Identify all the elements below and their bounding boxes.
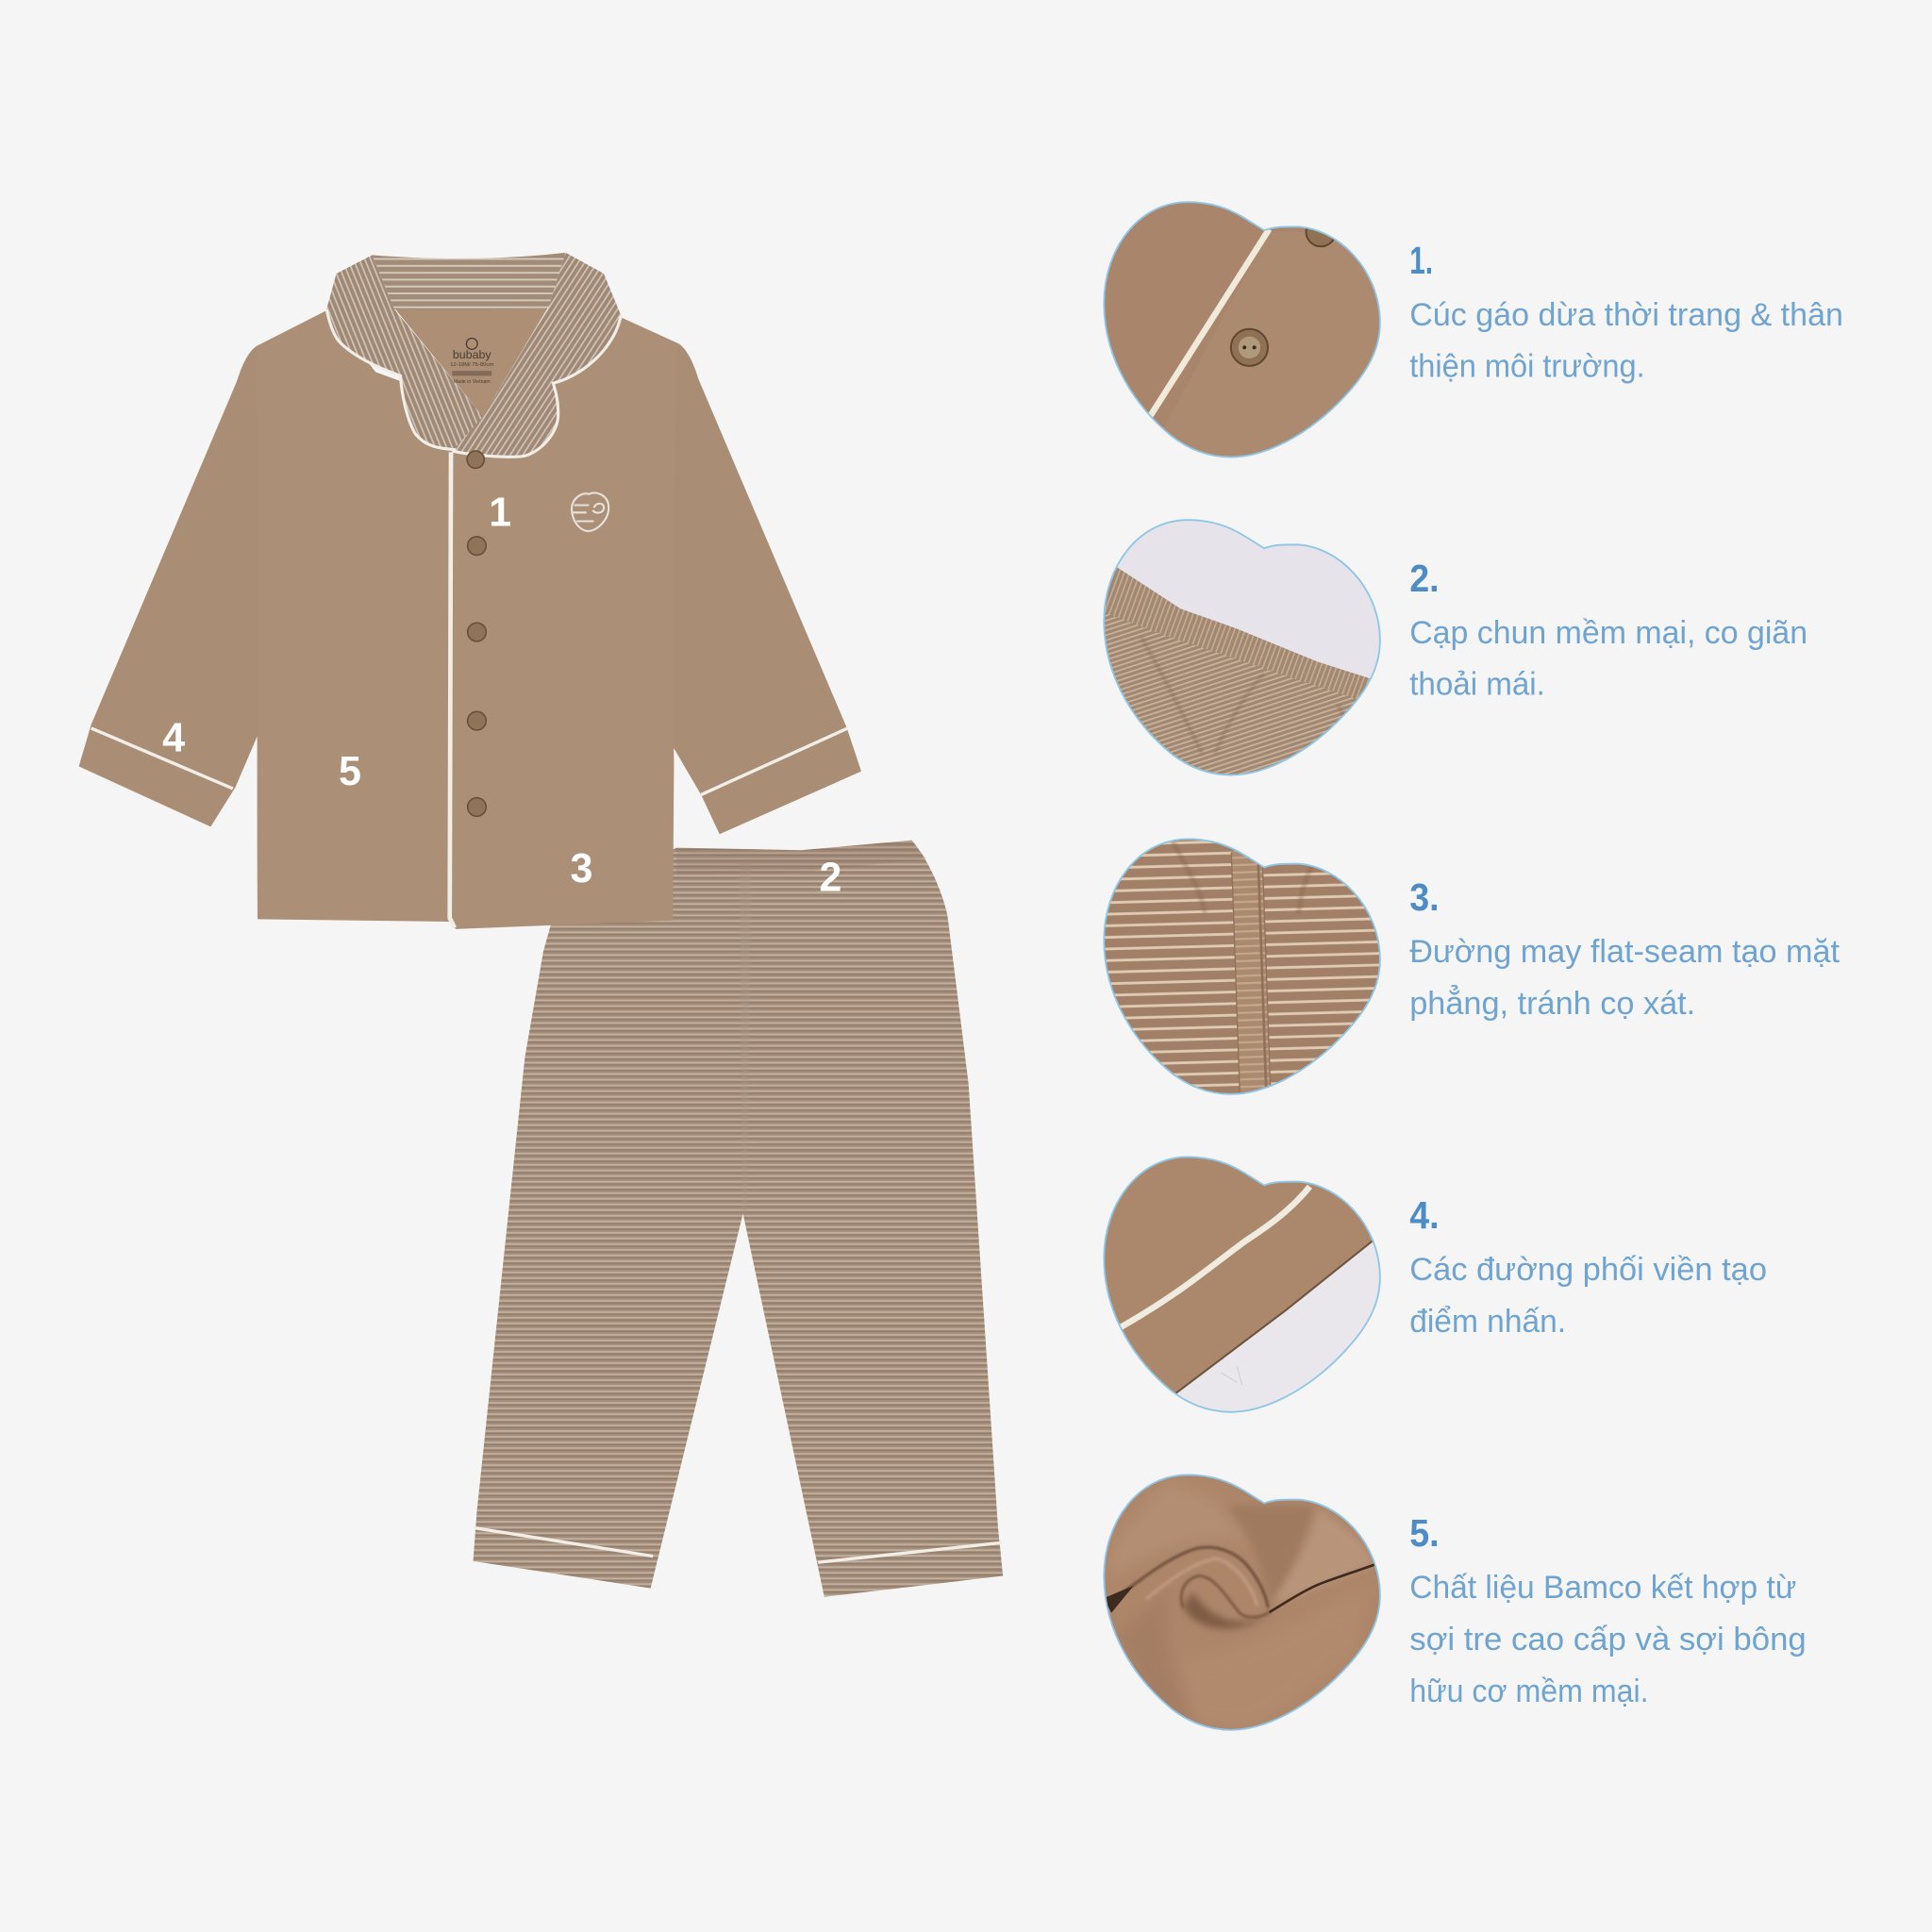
embroidered heart logo: [572, 492, 608, 531]
feature 4 text: Các đường phối viền tạo: [1409, 1252, 1767, 1288]
right cuff piping: [701, 728, 848, 794]
pants left hem piping: [475, 1528, 653, 1557]
pants body: [474, 841, 1003, 1597]
left dark wedge: [1104, 1586, 1134, 1613]
pants waistband: [676, 841, 926, 874]
feature marker 1: 1: [489, 491, 511, 536]
left cuff piping: [92, 728, 233, 789]
feature 5 text: 5.: [1409, 1511, 1440, 1555]
lower left dark drape: [1132, 1619, 1179, 1707]
feature 5 text: [1409, 1511, 1807, 1709]
light lower drape: [1178, 1586, 1369, 1730]
pants centre seam shading: [740, 862, 752, 1214]
feature marker 2: 2: [819, 855, 841, 900]
feature 3 text: [1409, 875, 1840, 1022]
light top-left drape: [1124, 1500, 1213, 1555]
shirt body: [257, 310, 679, 929]
feature 5 text: hữu cơ mềm mại.: [1409, 1674, 1649, 1709]
feature 3 text: Đường may flat-seam tạo mặt: [1409, 934, 1840, 970]
neck inside: [394, 307, 548, 416]
feature 3 text: 3.: [1409, 875, 1440, 919]
right dark crease: [1271, 1563, 1377, 1611]
feature 4 text: [1409, 1193, 1767, 1340]
left dark crease: [1109, 1547, 1268, 1607]
feature 5 text: sợi tre cao cấp và sợi bông: [1409, 1622, 1807, 1657]
neck label: 12-18M/ 76-80cm: [450, 362, 493, 368]
product: pyjama pants: [474, 841, 1003, 1597]
feature 1 text: Cúc gáo dừa thời trang & thân: [1409, 297, 1843, 333]
neck label: Made in Vietnam: [454, 379, 491, 385]
feature 4 text: điểm nhấn.: [1409, 1304, 1566, 1340]
feature 1 text: 1.: [1409, 239, 1433, 282]
feature marker 3: 3: [571, 846, 592, 891]
heart photo 2: elastic waistband: [1104, 520, 1382, 775]
coconut buttons: [467, 451, 486, 816]
feature 1 text: thiện môi trường.: [1409, 349, 1645, 385]
heart photo 4: piped cuff: [1104, 1157, 1380, 1412]
neck label: bubaby: [453, 348, 491, 361]
collar back stripes: [372, 253, 566, 310]
heart photo 3: flat seam: [1104, 839, 1380, 1094]
feature 1 text: [1409, 239, 1843, 385]
feature 4 text: 4.: [1409, 1193, 1440, 1237]
dark wedge above centre: [1233, 1507, 1309, 1598]
collar left piping: [326, 309, 456, 450]
fold shading under swirl: [1183, 1592, 1271, 1629]
feature 2 text: [1409, 557, 1807, 703]
feature marker 5: 5: [339, 749, 361, 794]
feature 2 text: thoải mái.: [1409, 667, 1545, 703]
neck label: [450, 339, 493, 385]
collar left: [326, 255, 483, 450]
placket piping: [450, 452, 455, 928]
feature 2 text: Cạp chun mềm mại, co giãn: [1409, 615, 1807, 651]
pants right hem piping: [818, 1542, 1002, 1562]
feature 3 text: phẳng, tránh cọ xát.: [1409, 984, 1695, 1022]
second fold: [1147, 1558, 1257, 1605]
feature 5 text: Chất liệu Bamco kết hợp từ: [1409, 1570, 1796, 1606]
light right wedge: [1275, 1513, 1372, 1602]
heart photo 5: fabric swirl: [1104, 1474, 1380, 1730]
feature 2 text: 2.: [1409, 557, 1440, 600]
shirt right sleeve: [591, 343, 861, 834]
feature marker 4: 4: [162, 716, 185, 761]
inner swirl fold: [1181, 1576, 1271, 1617]
product: pyjama shirt: [79, 253, 861, 929]
shirt left sleeve: [79, 346, 345, 826]
heart photo 1: coconut button: [1104, 202, 1380, 458]
collar right: [452, 253, 621, 457]
collar right piping: [452, 315, 621, 457]
